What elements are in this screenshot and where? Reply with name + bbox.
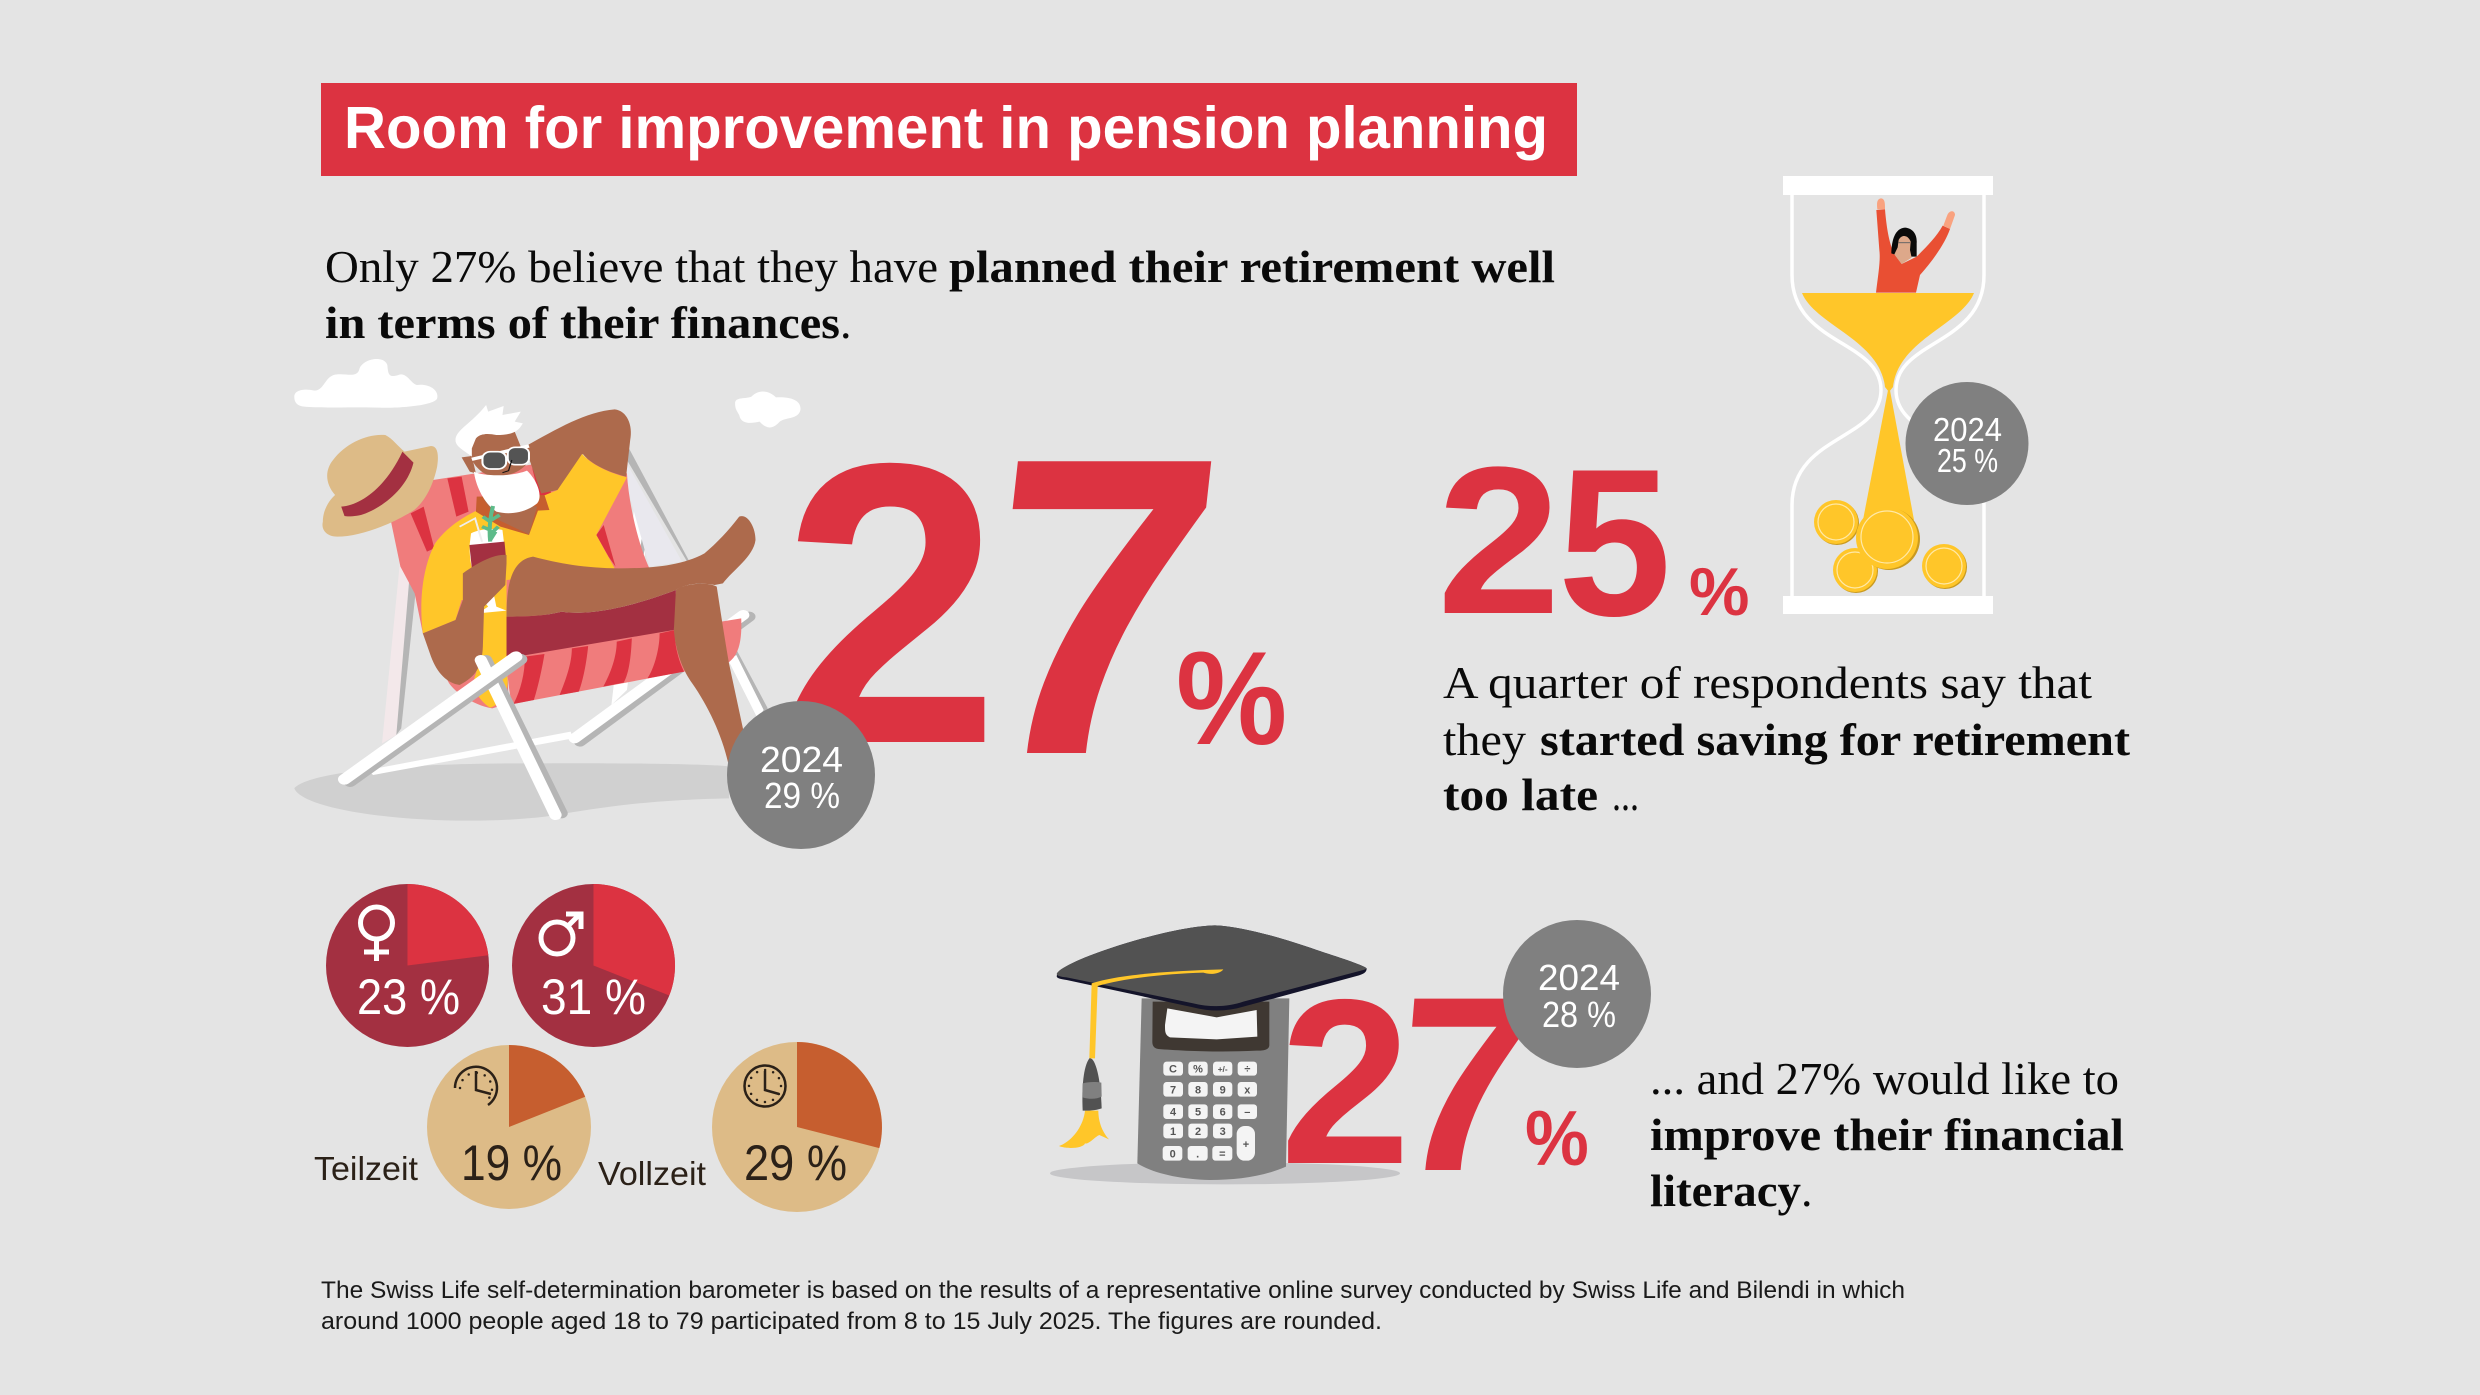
badge: 2024 28 percent: 28 %	[1542, 994, 1616, 1035]
big number 25 percent: 2	[1437, 423, 1561, 658]
calculator keys: 1	[1170, 1126, 1176, 1138]
icon: female symbol	[360, 907, 392, 961]
text block: financial literacy: improve their financial	[1650, 1109, 2124, 1160]
calculator keys: 6	[1220, 1107, 1226, 1119]
calculator keys: .	[1196, 1148, 1199, 1160]
graduation cap	[1057, 925, 1367, 1011]
calculator keys	[1163, 1062, 1257, 1161]
illustration: calculator with graduation cap	[1050, 925, 1400, 1184]
intro text block: planned their retirement well	[949, 241, 1555, 292]
label: Teilzeit: Teilzeit	[314, 1150, 418, 1187]
pie: full-time 29 percent: 29 %	[744, 1135, 847, 1191]
calculator keys: C	[1169, 1064, 1177, 1076]
straw hat	[322, 435, 438, 537]
calculator keys: 8	[1195, 1084, 1201, 1096]
cap tassel	[1059, 969, 1223, 1148]
badge: 2024 25 percent	[1906, 382, 2028, 505]
big number 25 percent	[1437, 423, 1749, 660]
pie: women 23 percent: 23 %	[357, 969, 460, 1025]
calculator body	[1137, 998, 1289, 1180]
pie: women 23 percent	[326, 884, 489, 1047]
text block: started saving too late: started saving for retirement	[1540, 714, 2131, 765]
man's head	[456, 405, 540, 513]
canvas stripes back	[411, 457, 616, 567]
big number 27 percent, financial literacy: 7	[1386, 944, 1545, 1223]
icon: part-time clock	[455, 1067, 497, 1105]
big number 27 percent: 2	[782, 379, 1000, 827]
text block: financial literacy: ... and 27% would like to	[1650, 1053, 2119, 1104]
pie: full-time 29 percent	[712, 1042, 882, 1212]
canvas back	[391, 457, 649, 708]
big number 27 percent, financial literacy: %	[1525, 1094, 1589, 1182]
calculator keys: ÷	[1244, 1064, 1250, 1076]
falling sand	[1802, 293, 1974, 520]
intro text block: in terms of their finances	[325, 297, 840, 348]
man's raised arm	[525, 409, 631, 493]
calculator keys: 0	[1170, 1148, 1176, 1160]
text block: started saving too late: they	[1443, 714, 1526, 765]
calculator keys: 3	[1220, 1126, 1226, 1138]
badge: 2024 29 percent: 29 %	[764, 775, 840, 816]
yellow shirt	[421, 454, 627, 708]
gold coins	[1814, 500, 1967, 593]
text block: financial literacy	[1650, 1053, 2124, 1216]
big number 27 percent	[782, 369, 1287, 843]
chair shadow	[294, 763, 729, 821]
big number 27 percent: %	[1176, 624, 1287, 773]
icon: full-time clock	[744, 1066, 786, 1106]
canvas seat	[507, 618, 741, 704]
calculator keys: %	[1193, 1064, 1203, 1076]
calculator keys: +	[1243, 1139, 1249, 1151]
chair front frame	[344, 657, 562, 815]
intro text block: .	[840, 297, 852, 348]
icon: large cloud	[294, 359, 437, 408]
big number 25 percent: 5	[1558, 425, 1671, 660]
drink with garnish	[460, 506, 507, 613]
pie: part-time 19 percent: 19 %	[461, 1135, 562, 1191]
hourglass caps	[1783, 176, 1993, 614]
text block: started saving too late: A quarter of respondents say that	[1443, 657, 2092, 708]
calculator screen	[1152, 1002, 1269, 1052]
pie: men 31 percent	[512, 884, 675, 1047]
text block: started saving too late: too late	[1443, 769, 1598, 820]
shirt collar and neck	[476, 495, 549, 535]
calculator keys: 9	[1220, 1084, 1226, 1096]
hourglass outline	[1792, 195, 1984, 596]
big number 27 percent, financial literacy	[1280, 944, 1589, 1223]
pie: men 31 percent: 31 %	[541, 969, 646, 1025]
pie: part-time 19 percent	[427, 1045, 591, 1209]
calculator keys: 7	[1170, 1084, 1176, 1096]
label: Vollzeit: Vollzeit	[598, 1155, 706, 1192]
big number 25 percent: %	[1689, 554, 1749, 630]
text block: financial literacy: .	[1801, 1165, 1812, 1216]
title banner	[321, 83, 1577, 176]
big number 27 percent: 7	[958, 369, 1240, 843]
badge: 2024 25 percent: 2024	[1933, 411, 2002, 448]
icon: small cloud	[735, 391, 800, 427]
calculator keys: =	[1219, 1148, 1226, 1160]
calculator keys: –	[1244, 1107, 1250, 1119]
badge: 2024 29 percent: 2024	[760, 739, 843, 780]
footnote	[321, 1277, 1905, 1335]
badge: 2024 29 percent	[727, 701, 875, 849]
calculator keys: x	[1244, 1084, 1251, 1096]
title banner: Room for improvement in pension planning	[344, 95, 1548, 161]
intro text block: Only 27% believe that they have	[325, 241, 938, 292]
icon: male symbol	[541, 914, 581, 954]
badge: 2024 25 percent: 25 %	[1937, 442, 1998, 479]
calculator keys: 5	[1195, 1107, 1201, 1119]
badge: 2024 28 percent: 2024	[1538, 957, 1620, 998]
calculator shadow	[1050, 1162, 1400, 1184]
calculator keys: 4	[1170, 1107, 1177, 1119]
big number 27 percent, financial literacy: 2	[1280, 950, 1411, 1213]
calculator keys: +/-	[1218, 1064, 1228, 1074]
intro text block	[325, 241, 1555, 348]
calculator keys: 2	[1195, 1126, 1201, 1138]
woman with raised arms	[1876, 198, 1955, 293]
illustration: man relaxing in a deck chair	[294, 359, 800, 821]
text block: financial literacy: literacy	[1650, 1165, 1801, 1216]
badge: 2024 28 percent	[1503, 920, 1651, 1068]
illustration: hourglass with woman and coins	[1783, 176, 1993, 614]
text block: started saving too late: ...	[1612, 769, 1639, 820]
footnote: around 1000 people aged 18 to 79 participated from 8 to 15 July 2025. The figures are rounded.	[321, 1308, 1382, 1335]
man's near arm	[423, 555, 507, 685]
crossed leg	[507, 516, 756, 767]
footnote: The Swiss Life self-determination barometer is based on the results of a representative online survey conducted by Swiss Life and Bilendi in which	[321, 1277, 1905, 1304]
chair rear frame	[368, 448, 768, 775]
text block: started saving too late	[1443, 657, 2131, 820]
